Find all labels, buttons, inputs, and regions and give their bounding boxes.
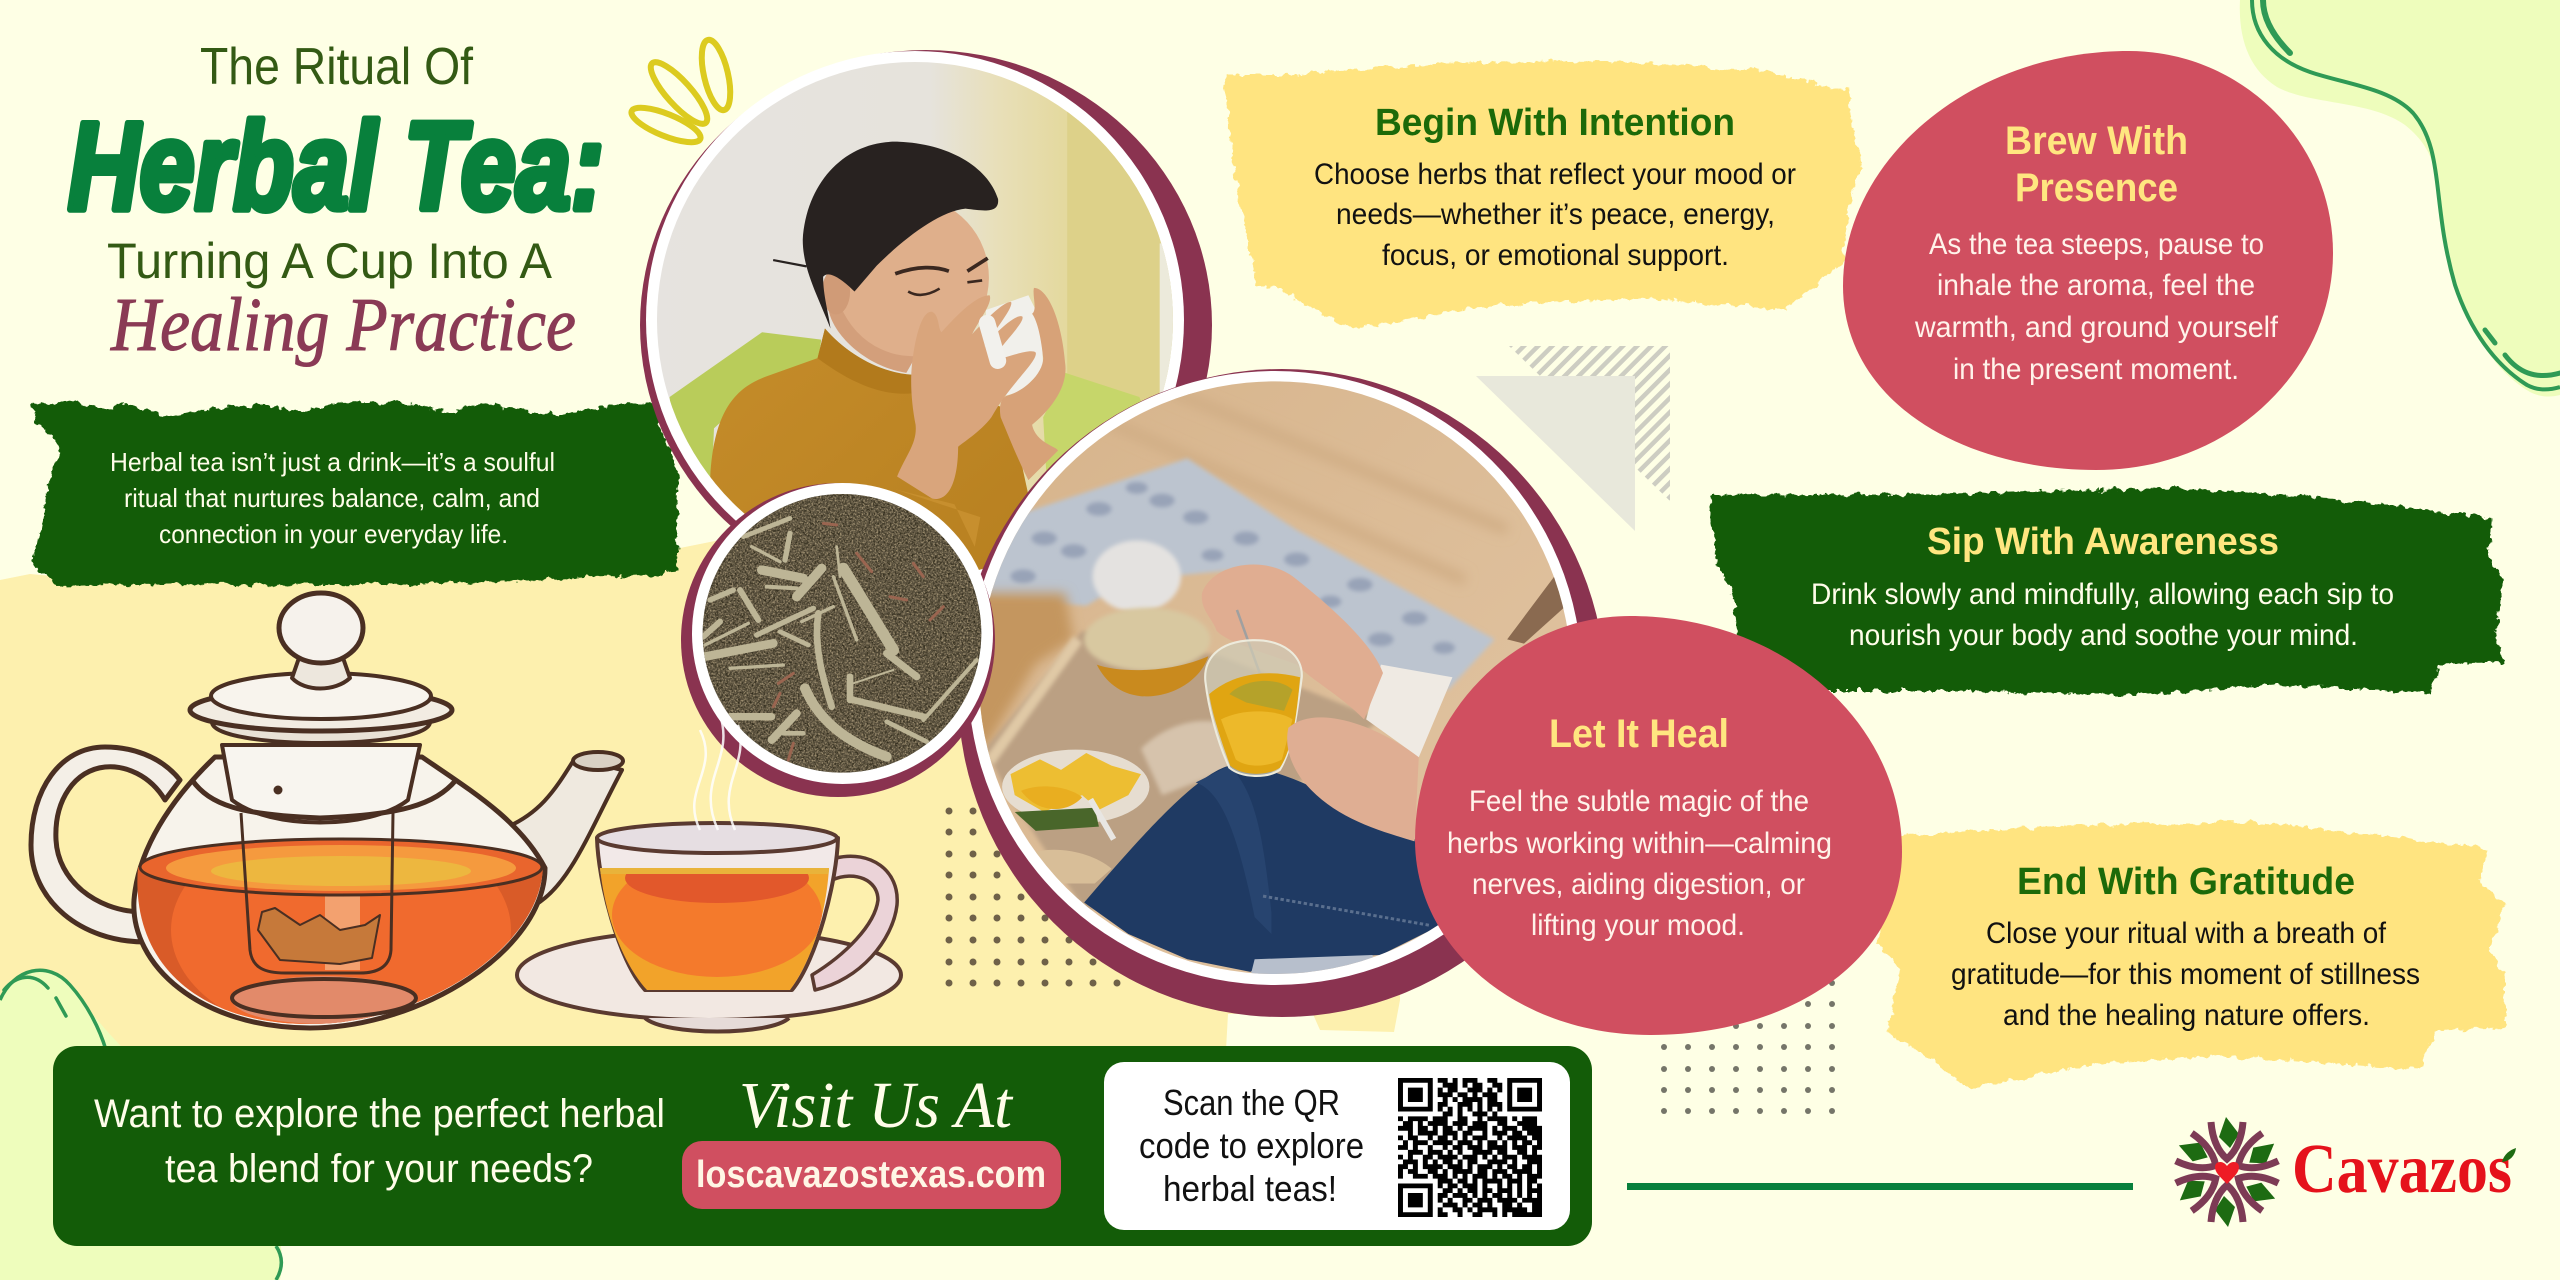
panel: brew with presence: Presence [2015,166,2178,210]
teapot knob [292,655,350,688]
cup tea [600,868,829,990]
call to action question: Want to explore the perfect herbal [94,1092,665,1136]
QR code [1398,1078,1542,1217]
call to action band: tea blend for your needs? [165,1147,593,1191]
photo circle: stirring herbal tea [958,369,1620,1030]
panel: let it heal: Let It Heal [1549,712,1729,756]
panel: begin with intention: focus, or emotional support. [1382,239,1729,272]
teapot body [134,757,545,1028]
panel: brew with presence: inhale the aroma, feel the [1937,269,2255,302]
panel: intro text: Herbal tea isn’t just a drink—it’s a soulful [110,447,555,477]
panel: intro text: connection in your everyday life. [159,519,508,549]
panel: end with gratitude: and the healing nature offers. [2003,999,2370,1032]
logo emblem [2171,1117,2283,1227]
panel: begin with intention [1224,61,1862,329]
QR panel [1104,1062,1570,1230]
panel: sip with awareness [1709,488,2504,695]
cup rim [597,823,837,853]
panel: end with gratitude [1876,822,2505,1089]
panel: begin with intention: Choose herbs that reflect your mood or [1314,158,1796,191]
logo: Cavazos [2171,1117,2516,1227]
teapot neck and lid [222,745,420,822]
panel: brew with presence: in the present moment. [1953,353,2239,386]
panel: end with gratitude: gratitude—for this moment of stillness [1951,958,2420,991]
panel: brew with presence: Brew With [2005,119,2188,163]
steam wisps [694,715,741,830]
panel: sip with awareness: Drink slowly and mindfully, allowing each sip to [1811,578,2394,611]
QR panel: herbal teas! [1163,1168,1337,1209]
panel: brew with presence: As the tea steeps, pause to [1929,228,2264,261]
geometric triangles [1476,346,1670,531]
title line: Healing Practice: Healing Practice [110,283,576,367]
panel: begin with intention: Begin With Intention [1375,102,1735,144]
panel: let it heal: Feel the subtle magic of the [1469,785,1809,818]
cup handle [812,856,897,990]
green divider line [1627,1183,2133,1190]
title line: Herbal Tea: Herbal Tea: [68,98,604,236]
call to action band [53,1046,1592,1246]
QR panel: Scan the QR [1163,1082,1340,1123]
illustration: tea cup and saucer [517,823,901,1032]
decorative blob: top right [2240,0,2560,397]
icon: yellow petal doodle [628,37,736,149]
panel: end with gratitude: Close your ritual with a breath of [1986,917,2387,950]
panel: let it heal [1415,616,1902,1035]
cup body [597,838,838,990]
title block [68,38,604,367]
panel: brew with presence [1843,51,2333,470]
saucer [517,930,901,1020]
panel: sip with awareness: nourish your body and soothe your mind. [1849,619,2358,652]
panel: end with gratitude: End With Gratitude [2017,861,2355,903]
teapot handle [31,747,180,942]
panel: let it heal: herbs working within—calming [1447,827,1832,860]
logo wordmark: Cavazos [2292,1131,2512,1208]
panel: let it heal: lifting your mood. [1531,909,1745,942]
panel: intro text [31,402,679,586]
title line: The Ritual Of: The Ritual Of [200,38,473,96]
decorative blob: bottom left [0,970,282,1280]
panel: sip with awareness: Sip With Awareness [1927,521,2279,563]
dotted pattern: centre [946,808,1120,986]
website pill [682,1141,1061,1209]
yellow background panel [0,540,1400,1050]
tea liquid [137,867,543,1024]
QR panel: code to explore [1139,1125,1364,1166]
photo circle: dried herbs [681,483,995,797]
panel: let it heal: nerves, aiding digestion, or [1472,868,1805,901]
tea infuser [241,813,393,973]
panel: begin with intention: needs—whether it’s peace, energy, [1336,198,1775,231]
panel: intro text: ritual that nurtures balance, calm, and [124,483,540,513]
panel: brew with presence: warmth, and ground yourself [1914,311,2279,344]
visit us heading: Visit Us At [739,1069,1014,1142]
website pill: loscavazostexas.com [696,1154,1046,1196]
photo circle: woman sipping tea [640,50,1212,574]
illustration: glass teapot [31,593,623,1040]
dotted pattern: lower right [1661,980,1835,1114]
teapot spout [500,758,622,905]
title line: Turning A Cup Into A: Turning A Cup Into A [107,233,553,289]
